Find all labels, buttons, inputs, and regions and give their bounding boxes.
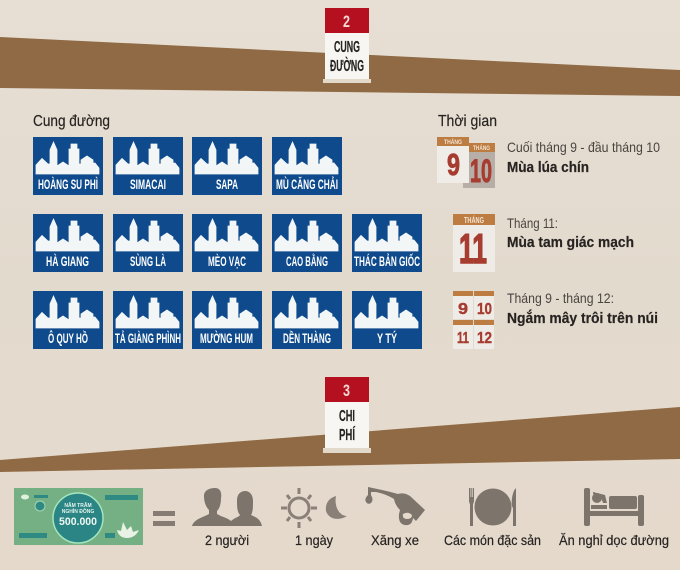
tile: Mèo Vạc [192, 214, 262, 272]
heading: thời gian: Thời gian [438, 113, 497, 130]
tile: Sùng Là [113, 214, 183, 272]
milestone 3: chi phí: CHI [339, 408, 355, 425]
banknote 500.000: NĂM TRĂM [64, 502, 92, 509]
icon: bed [584, 488, 644, 526]
tile: Hà Giang [33, 214, 103, 272]
tile: Ô Quy Hồ [33, 291, 103, 349]
text: ngắm mây trôi trên núi [507, 290, 658, 327]
tile: Mèo Vạc: MÈO VẠC [208, 253, 246, 269]
text: ngắm mây trôi trên núi: Ngắm mây trôi trên núi [507, 309, 658, 327]
equals sign [153, 511, 175, 526]
label: ăn nghỉ dọc đường: Ăn nghỉ dọc đường [559, 532, 669, 548]
milestone 2: cung đường: 2 [343, 12, 350, 31]
tile: Simacai: SIMACAI [130, 176, 166, 192]
banknote 500.000: NGHÌN ĐỒNG [62, 507, 94, 515]
label: xăng xe: Xăng xe [371, 532, 419, 548]
route tiles [33, 137, 422, 349]
calendar icon: tháng 9 và 10: THÁNG [473, 145, 490, 152]
milestone 2: cung đường: ĐƯỜNG [330, 56, 364, 75]
tile: Sùng Là: SÙNG LÀ [130, 252, 166, 269]
calendar icon: tháng 9 đến 12 [453, 291, 494, 349]
calendar icon: tháng 11: THÁNG [464, 216, 484, 225]
text: mùa lúa chín: Cuối tháng 9 - đầu tháng 10 [507, 139, 660, 155]
tile: Cao Bằng [272, 214, 342, 272]
tile: Sapa [192, 137, 262, 195]
text: mùa lúa chín [507, 139, 660, 176]
calendar icon: tháng 9 đến 12: 12 [477, 330, 492, 347]
tile: Simacai [113, 137, 183, 195]
icon: two people [192, 488, 262, 526]
tile: Ô Quy Hồ: Ô QUY HỒ [48, 329, 88, 346]
tile: Thác Bản Giốc [352, 214, 422, 272]
label: các món đặc sản: Các món đặc sản [444, 532, 541, 548]
tile: Thác Bản Giốc: THÁC BẢN GIỐC [354, 252, 420, 269]
calendar icon: tháng 9 và 10: 10 [470, 153, 492, 189]
tile: Dền Thàng: DỀN THÀNG [283, 330, 331, 346]
label: 1 ngày: 1 ngày [295, 532, 333, 548]
tile: Y Tý [352, 291, 422, 349]
icon: fuel nozzle [365, 487, 425, 525]
heading: cung đường: Cung đường [33, 113, 110, 130]
calendar icon: tháng 9 đến 12: 9 [458, 301, 468, 318]
label: 2 người: 2 người [205, 532, 249, 548]
icon: plate, fork and knife [469, 488, 516, 526]
tile: Hoàng Su Phì [33, 137, 103, 195]
tile: Y Tý: Y TÝ [377, 329, 397, 346]
tile: Tả Giàng Phình [113, 291, 183, 349]
calendar icon: tháng 9 đến 12: 11 [457, 330, 469, 347]
tile: Hà Giang: HÀ GIANG [46, 253, 89, 269]
calendar icon: tháng 9 và 10: 9 [447, 147, 460, 182]
milestone 2: cung đường: CUNG [334, 39, 360, 56]
milestone 3: chi phí: 3 [343, 381, 350, 400]
milestone 2: cung đường [323, 8, 371, 83]
bottom brown band [0, 407, 680, 472]
tile: Cao Bằng: CAO BẰNG [286, 252, 328, 269]
text: mùa tam giác mạch [507, 215, 634, 251]
text: mùa lúa chín: Mùa lúa chín [507, 159, 589, 176]
icon: sun and moon [281, 488, 347, 528]
top brown band [0, 37, 680, 96]
tile: Mù Căng Chải: MÙ CĂNG CHẢI [276, 175, 338, 192]
tile: Tả Giàng Phình: TẢ GIÀNG PHÌNH [115, 330, 181, 346]
calendar icon: tháng 11 [453, 214, 495, 272]
tile: Mù Căng Chải [272, 137, 342, 195]
text: mùa tam giác mạch: Mùa tam giác mạch [507, 234, 634, 251]
tile: Hoàng Su Phì: HOÀNG SU PHÌ [38, 176, 98, 192]
milestone 3: chi phí: PHÍ [339, 425, 355, 444]
tile: Mường Hum: MƯỜNG HUM [200, 329, 253, 346]
calendar icon: tháng 9 và 10: THÁNG [444, 139, 462, 146]
banknote 500.000 [14, 488, 143, 545]
calendar icon: tháng 9 đến 12: 10 [477, 301, 492, 318]
calendar icon: tháng 11: 11 [459, 225, 487, 272]
tile: Sapa: SAPA [216, 176, 238, 192]
text: mùa tam giác mạch: Tháng 11: [507, 215, 558, 231]
tile: Dền Thàng [272, 291, 342, 349]
tile: Mường Hum [192, 291, 262, 349]
banknote 500.000: 500.000 [59, 516, 97, 528]
calendar icon: tháng 9 và 10 [437, 137, 495, 189]
milestone 3: chi phí [323, 377, 371, 453]
text: ngắm mây trôi trên núi: Tháng 9 - tháng 12: [507, 290, 614, 306]
